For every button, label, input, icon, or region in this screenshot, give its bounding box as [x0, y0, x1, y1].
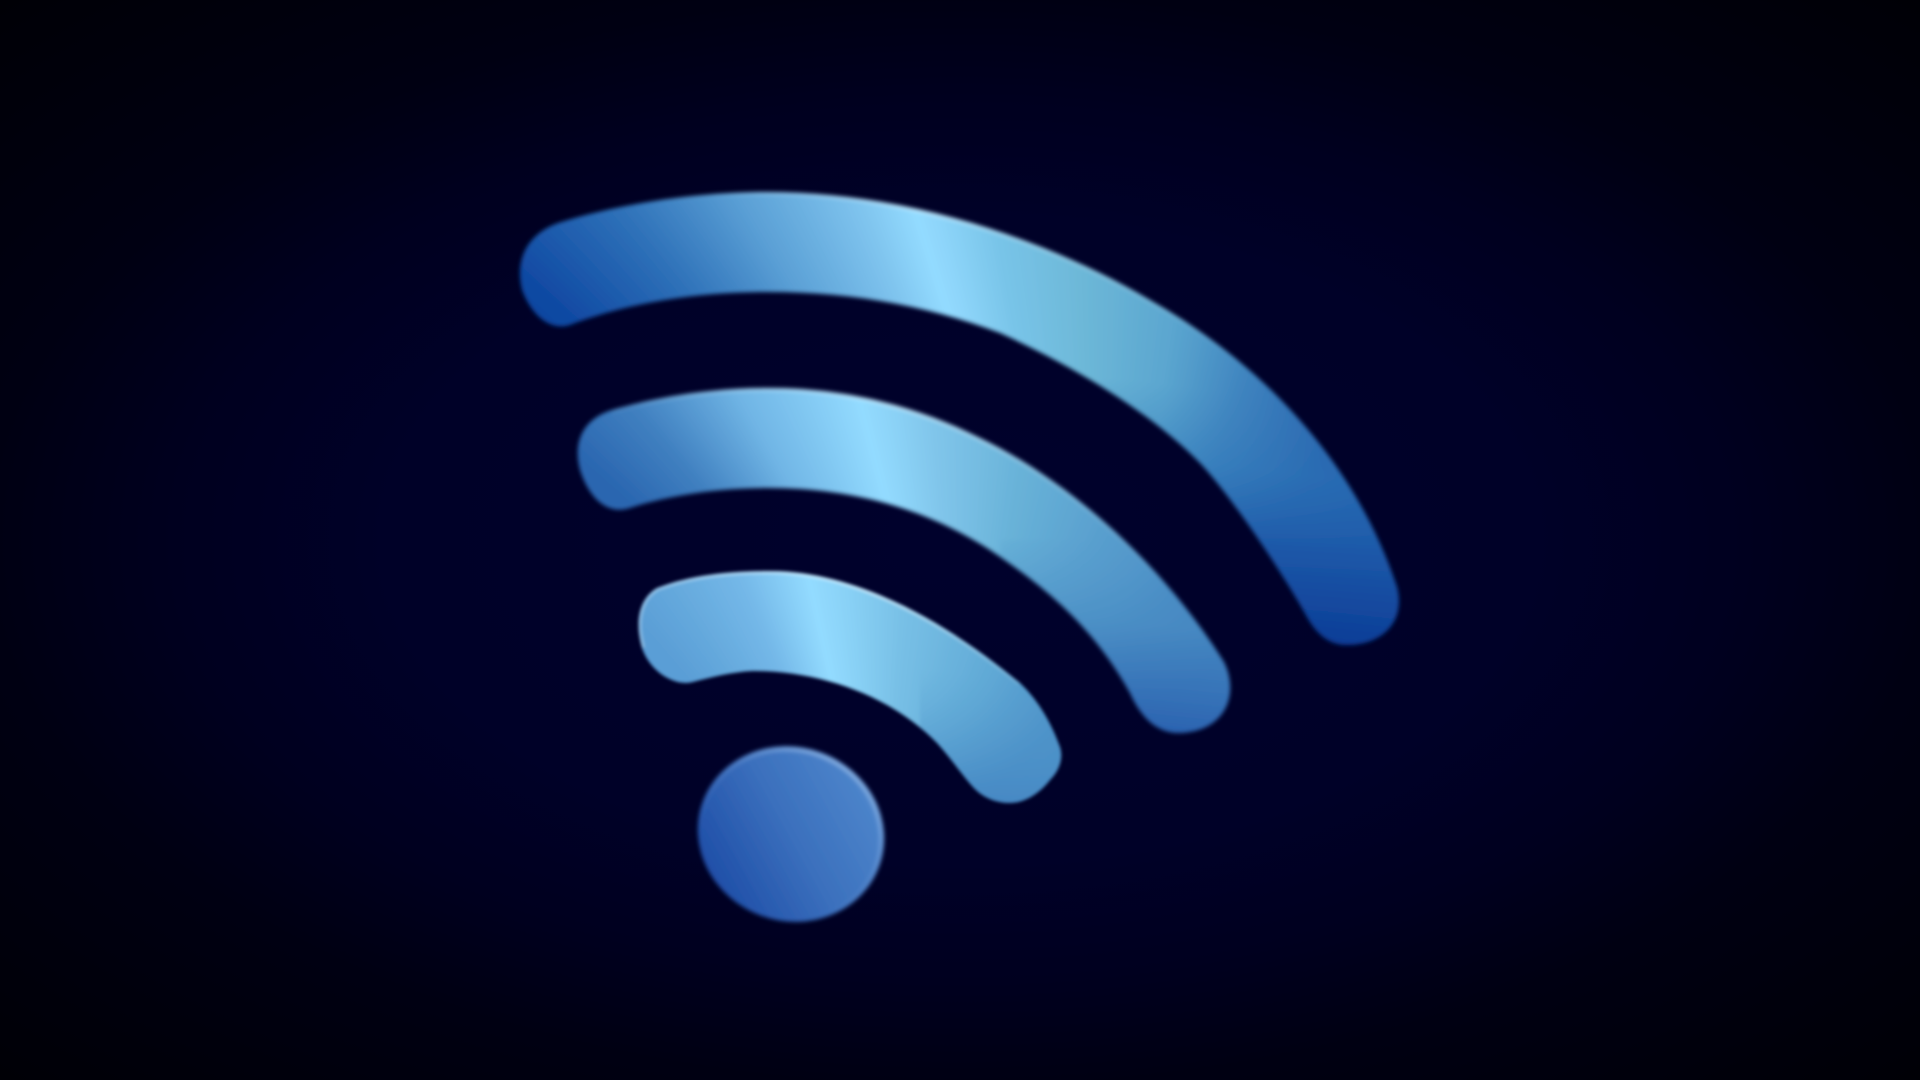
- center dot: [673, 720, 909, 948]
- outer arc: [500, 170, 1420, 660]
- wifi symbol: [517, 188, 1402, 925]
- middle arc: [574, 384, 1234, 736]
- inner arc: [636, 568, 1064, 806]
